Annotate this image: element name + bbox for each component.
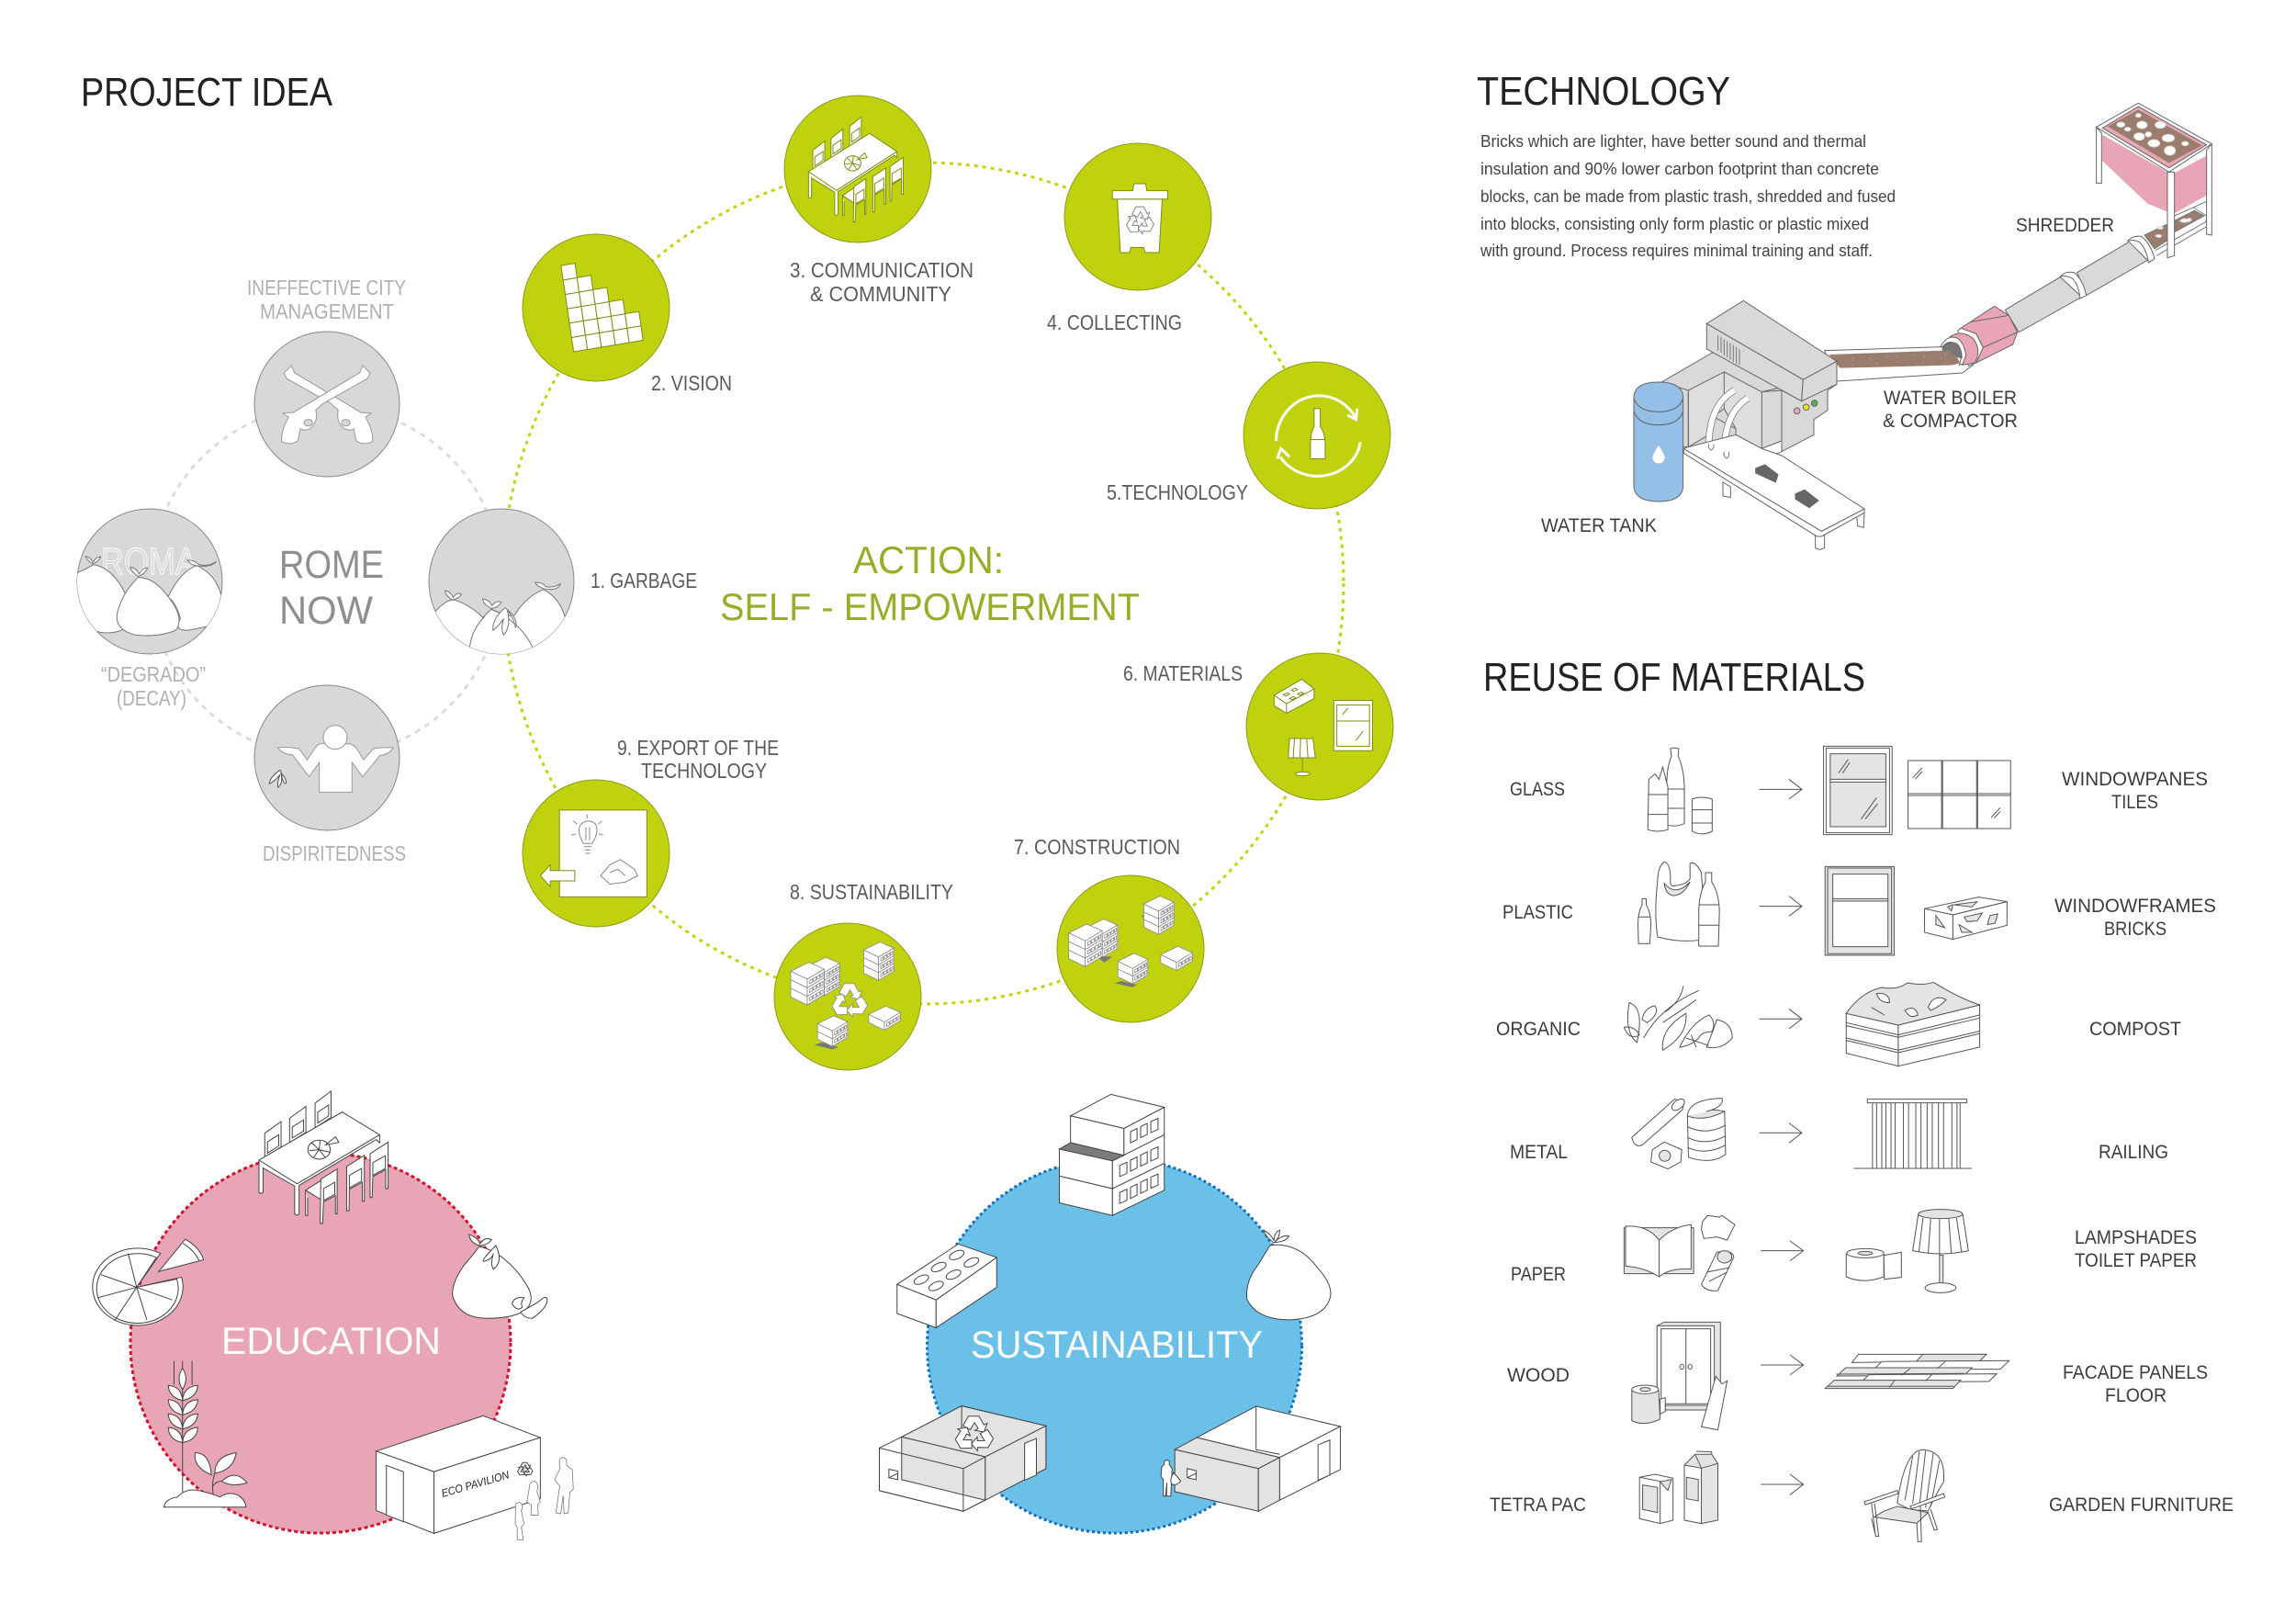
- row: plastic: BRICKS: [2104, 919, 2167, 940]
- icons: glass items to window and tiles: [1648, 746, 2010, 835]
- step 8: sustainability blocks icon: [774, 923, 921, 1070]
- row: paper: TOILET PAPER: [2075, 1250, 2197, 1271]
- label: degrado: “DEGRADO”: [101, 662, 206, 686]
- panel: reuse table: [1490, 746, 2234, 1541]
- shredder and pipe: [1941, 103, 2212, 366]
- sustainability disc: [928, 1158, 1302, 1533]
- icon: modular building: [1059, 1094, 1165, 1215]
- text block: technology description: Bricks which are lighter, have better sound and thermal: [1480, 132, 1866, 151]
- label: degrado: [101, 662, 206, 710]
- row: paper: LAMPSHADES: [2075, 1227, 2197, 1248]
- step 6: materials icon: [1246, 653, 1393, 800]
- step 1 label: 1. GARBAGE: [591, 569, 697, 592]
- icons: organic scraps to compost box: [1624, 982, 1980, 1066]
- row: metal: RAILING: [2099, 1142, 2168, 1163]
- step 2 label: 2. VISION: [651, 371, 732, 395]
- step 4: recycling bin icon: [1064, 143, 1211, 290]
- row: glass: [1510, 746, 2208, 835]
- row: glass: WINDOWPANES: [2062, 769, 2208, 790]
- icon: brick: [897, 1244, 996, 1328]
- icon: eco pavilion: [377, 1415, 540, 1533]
- step 3 label: 3. COMMUNICATION: [790, 258, 974, 282]
- row: plastic: WINDOWFRAMES: [2054, 896, 2216, 917]
- row: tetra pac: [1490, 1449, 2234, 1541]
- step 2: vision icon: [523, 234, 670, 381]
- label: water boiler and compactor: [1883, 388, 2018, 432]
- step 5 label: 5.TECHNOLOGY: [1107, 480, 1248, 504]
- label: water tank: WATER TANK: [1541, 515, 1657, 536]
- icon: crossed pistols circle: [254, 332, 400, 477]
- icon: dispirited figure circle: [254, 685, 400, 830]
- icon: wheat: [168, 1361, 197, 1493]
- compactor machine: [1661, 300, 1960, 457]
- step 3: community table icon: [784, 96, 931, 242]
- row: tetra pac: TETRA PAC: [1490, 1494, 1586, 1516]
- panel: action cycle: [429, 96, 1393, 1070]
- icon: roma garbage bags circle: [71, 509, 225, 654]
- heading: action self-empowerment: SELF - EMPOWERMENT: [720, 585, 1140, 628]
- label: dispiritedness: DISPIRITEDNESS: [263, 841, 406, 865]
- icon: open box with collector: [1161, 1406, 1340, 1511]
- row: organic: ORGANIC: [1496, 1019, 1581, 1040]
- icon: garbage bag: [1246, 1230, 1331, 1320]
- step 7 label: 7. CONSTRUCTION: [1014, 835, 1180, 859]
- row: organic: [1496, 982, 2181, 1066]
- step 4 label: 4. COLLECTING: [1047, 310, 1182, 334]
- step 9: export icon: [523, 780, 670, 927]
- ring: rome now dotted cycle: [151, 406, 501, 757]
- heading: rome now: ROME: [279, 543, 384, 587]
- icon: recycling centre box: [879, 1406, 1046, 1511]
- label: ineffective city management: [247, 276, 406, 323]
- heading: rome now: [279, 543, 384, 633]
- education disc: [130, 1153, 511, 1533]
- water tank: [1634, 382, 1683, 502]
- icon: dining table: [259, 1091, 388, 1224]
- row: wood: WOOD: [1507, 1365, 1570, 1386]
- label: ineffective city management: INEFFECTIVE CITY: [247, 276, 406, 299]
- step 8 label: 8. SUSTAINABILITY: [790, 880, 953, 904]
- icons: metal items to railing: [1632, 1098, 1972, 1169]
- row: glass: GLASS: [1510, 779, 1565, 800]
- title: technology: TECHNOLOGY: [1477, 69, 1730, 114]
- row: metal: METAL: [1510, 1142, 1568, 1163]
- icons: wood items to panels: [1632, 1322, 2009, 1430]
- title: reuse of materials: REUSE OF MATERIALS: [1483, 655, 1865, 700]
- icon: roma garbage bags circle: ROMA: [101, 540, 197, 582]
- row: plastic: PLASTIC: [1503, 902, 1573, 923]
- row: wood: [1507, 1322, 2208, 1430]
- label: water boiler and compactor: WATER BOILER: [1884, 388, 2017, 409]
- step 1: garbage icon: [429, 509, 579, 656]
- icons: tetra packs to chair: [1639, 1449, 1944, 1541]
- step 6 label: 6. MATERIALS: [1123, 661, 1243, 685]
- heading: rome now: NOW: [279, 589, 373, 633]
- text block: technology description: [1480, 132, 1896, 260]
- icon: pizza: [93, 1239, 204, 1325]
- panel: sustainability: [879, 1094, 1340, 1533]
- diagram: brick-making machinery: [1634, 103, 2212, 549]
- conveyor belt and bricks: [1683, 434, 1864, 549]
- row: paper: [1511, 1210, 2197, 1292]
- text block: technology description: with ground. Process requires minimal training and staff.: [1480, 242, 1873, 260]
- sustainability illustrations: [879, 1094, 1340, 1511]
- label: eco pavilion sign: ECO PAVILION: [440, 1468, 511, 1500]
- row: wood: FACADE PANELS: [2063, 1362, 2208, 1383]
- icon: garbage bag with scraps: [453, 1235, 547, 1318]
- ring: action dotted cycle: [502, 163, 1344, 1004]
- text block: technology description: blocks, can be made from plastic trash, shredded and fused: [1480, 187, 1896, 206]
- tray and shredded plastic belt: [1825, 347, 1973, 381]
- label: degrado: (DECAY): [117, 686, 186, 710]
- panel: rome now: [71, 276, 406, 865]
- text block: technology description: insulation and 90% lower carbon footprint than concrete: [1480, 160, 1879, 178]
- step 7: construction blocks icon: [1057, 875, 1204, 1022]
- row: tetra pac: GARDEN FURNITURE: [2049, 1494, 2234, 1516]
- heading: action self-empowerment: [720, 538, 1140, 628]
- step 9 label: [617, 736, 779, 783]
- label: education: EDUCATION: [221, 1319, 441, 1362]
- row: organic: COMPOST: [2089, 1019, 2181, 1040]
- icons: plastic items to frame and brick: [1638, 862, 2007, 955]
- label: sustainability: SUSTAINABILITY: [971, 1323, 1263, 1366]
- label: ineffective city management: MANAGEMENT: [260, 299, 394, 323]
- step 9 label: TECHNOLOGY: [641, 759, 767, 783]
- row: plastic: [1503, 862, 2216, 955]
- row: metal: [1510, 1098, 2168, 1169]
- icon: visitors: [515, 1458, 573, 1539]
- text block: technology description: into blocks, consisting only form plastic or plastic mixed: [1480, 215, 1869, 233]
- step 9 label: 9. EXPORT OF THE: [617, 736, 779, 760]
- step 5: technology bottle cycle icon: [1244, 362, 1390, 509]
- panel: education: [93, 1091, 573, 1539]
- icons: paper items to roll and lamp: [1624, 1210, 1968, 1292]
- heading: action self-empowerment: ACTION:: [853, 538, 1004, 581]
- row: glass: TILES: [2111, 792, 2158, 813]
- icon: plant on mound: [163, 1453, 247, 1507]
- label: shredder: SHREDDER: [2016, 215, 2114, 236]
- step 3 label: [790, 258, 974, 306]
- step 3 label: & COMMUNITY: [810, 282, 951, 306]
- education illustrations: [93, 1091, 573, 1539]
- row: paper: PAPER: [1511, 1264, 1566, 1285]
- title: project idea: PROJECT IDEA: [81, 70, 333, 115]
- label: water boiler and compactor: & COMPACTOR: [1883, 411, 2018, 432]
- row: wood: FLOOR: [2105, 1385, 2167, 1406]
